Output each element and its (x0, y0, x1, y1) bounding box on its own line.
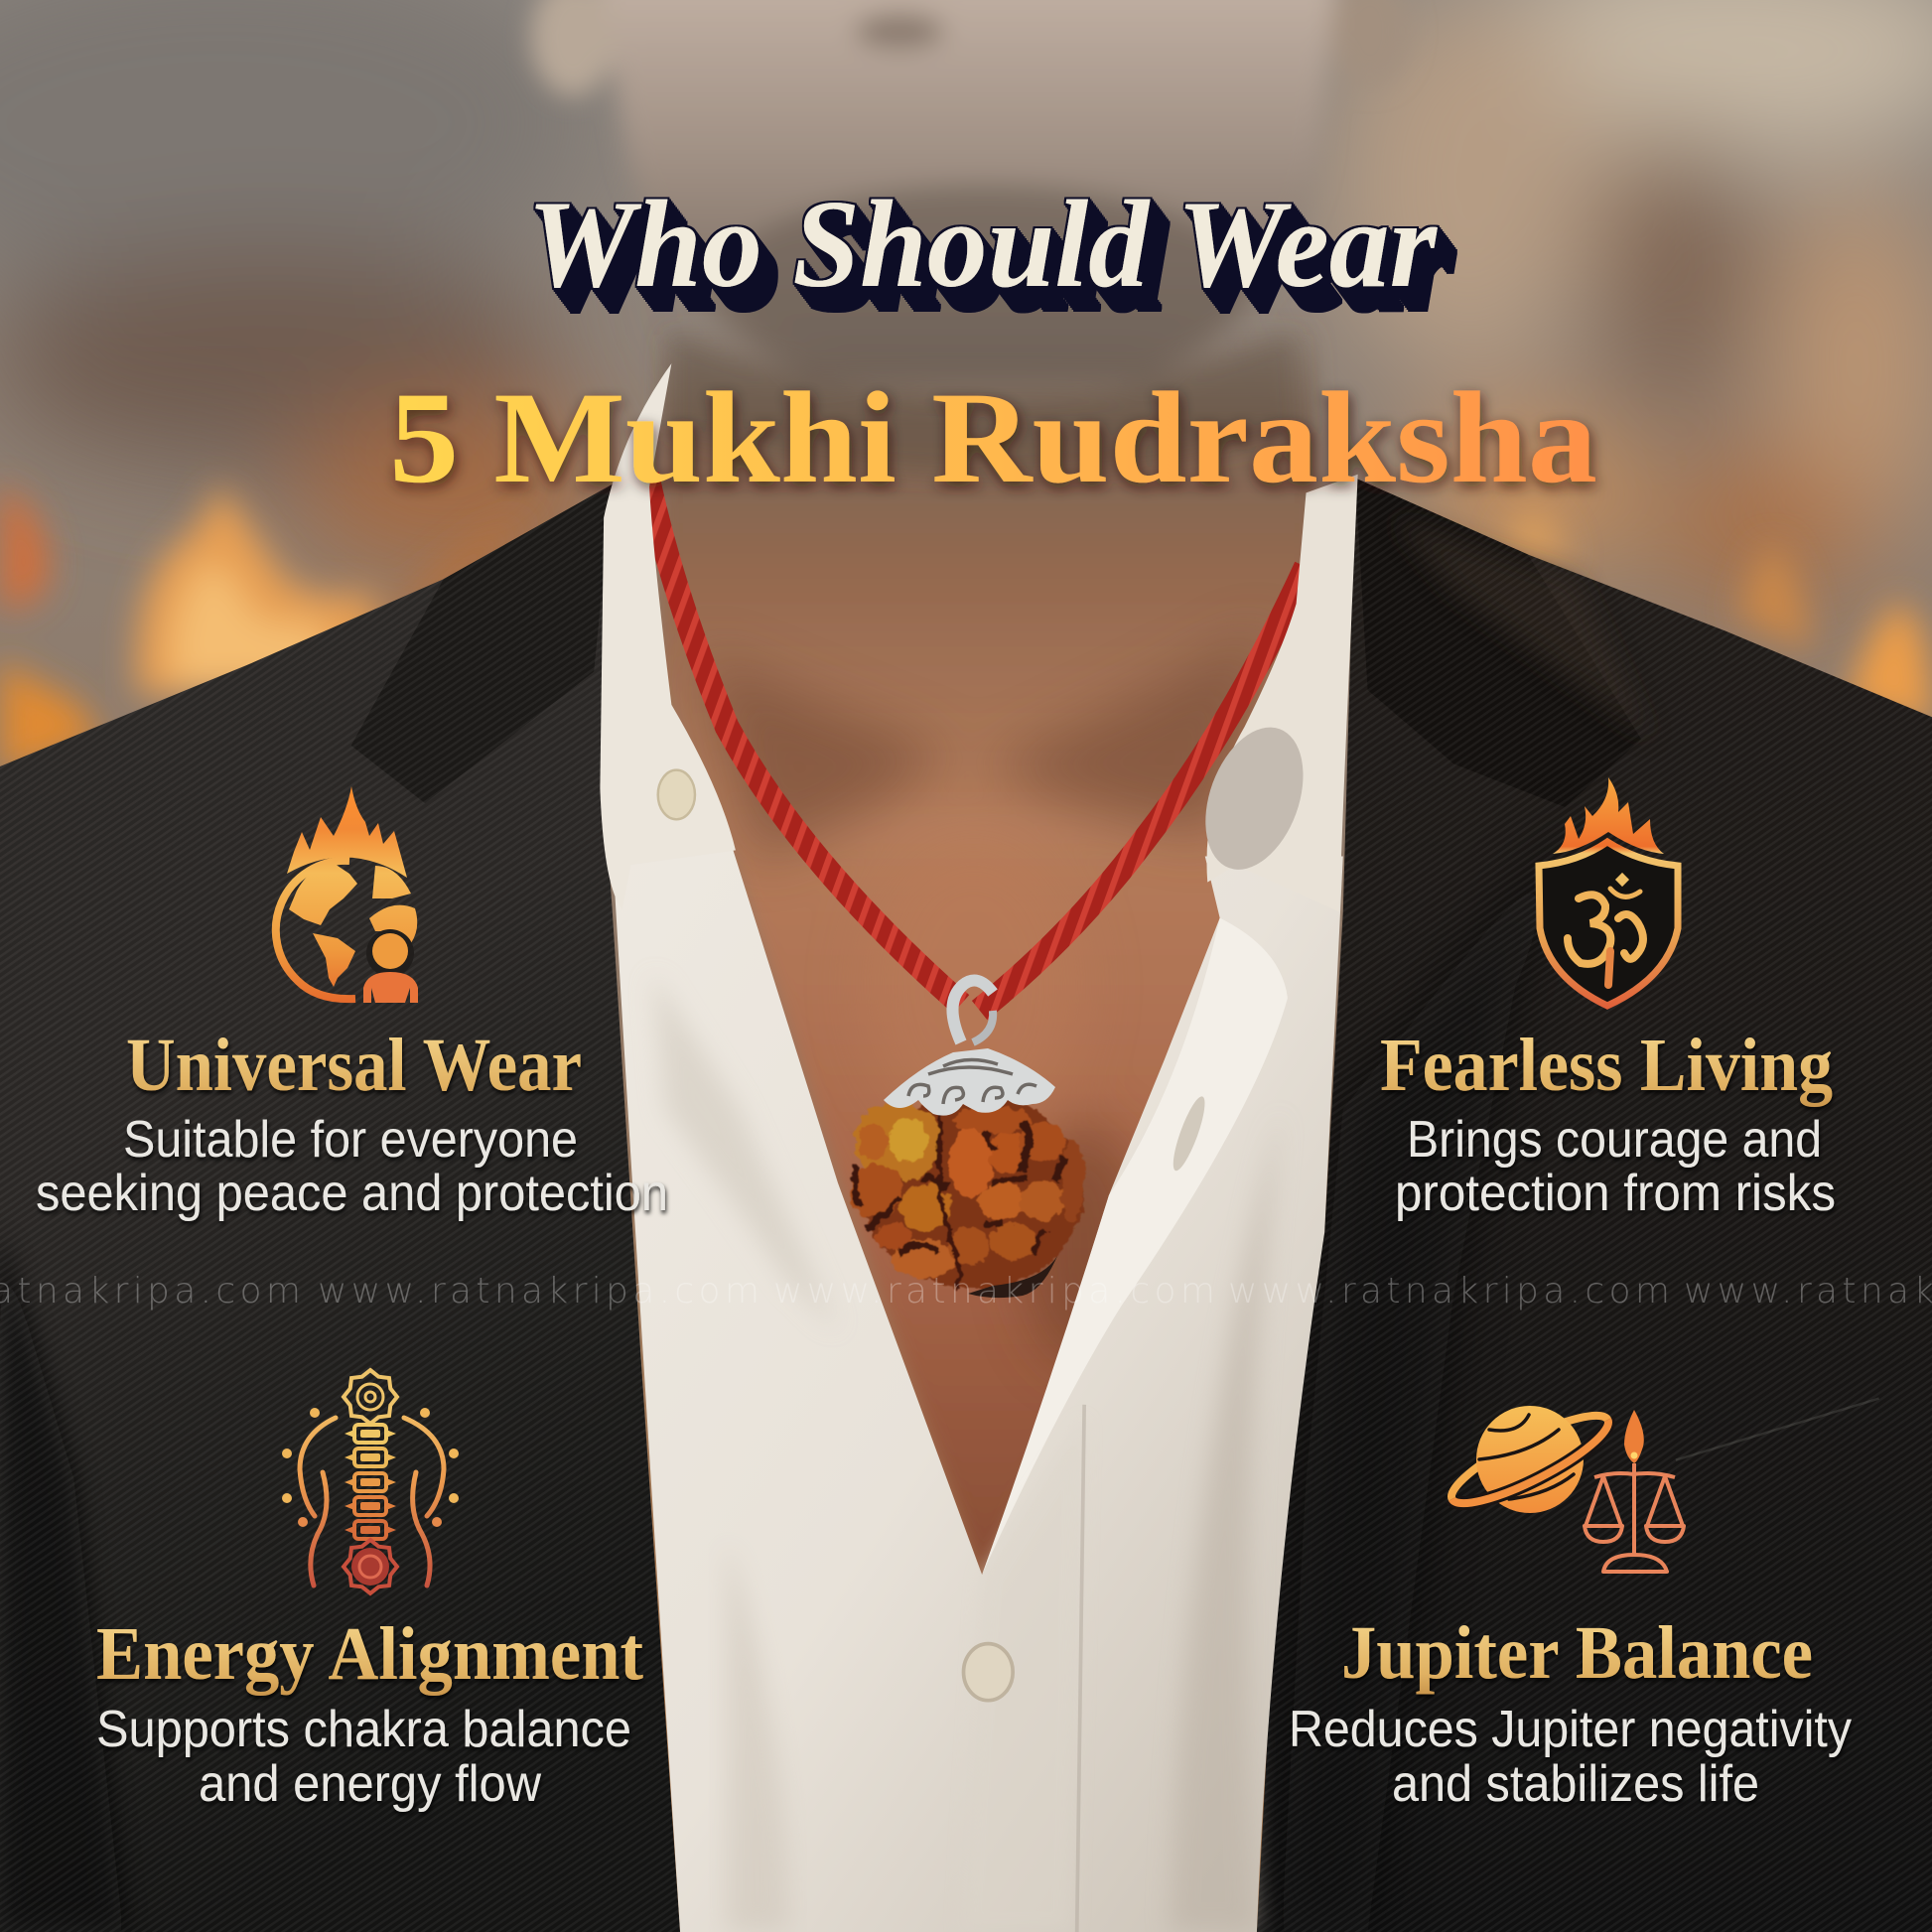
heading: Jupiter Balance (1341, 1611, 1813, 1695)
bare neck and chest (659, 321, 1318, 1589)
description (36, 1111, 668, 1222)
left jacket panel (0, 484, 680, 1932)
title line 2: 5 Mukhi Rudraksha (389, 364, 1597, 510)
description (1395, 1111, 1836, 1222)
panel: universal wear (36, 786, 668, 1222)
description: Supports chakra balance (96, 1701, 631, 1758)
heading: Fearless Living (1380, 1024, 1833, 1107)
icon: om shield with flames (1539, 777, 1678, 1006)
flames (0, 483, 1932, 776)
description: Brings courage and (1407, 1111, 1822, 1169)
right shirt collar (1187, 475, 1358, 911)
silver ring (952, 981, 993, 1042)
heading: Universal Wear (126, 1024, 582, 1107)
icon: spine with chakras (282, 1370, 459, 1593)
left shirt collar (600, 363, 736, 909)
watermark strip: www.ratnakripa.com (773, 1271, 1215, 1311)
icon: ringed planet and scales (1443, 1401, 1684, 1572)
description (96, 1701, 631, 1813)
description: and stabilizes life (1392, 1755, 1759, 1813)
red cord necklace (647, 475, 1307, 1011)
icon: flaming globe with person (276, 786, 418, 1003)
panel: energy alignment (96, 1370, 643, 1813)
description: and energy flow (199, 1755, 541, 1813)
white shirt (613, 801, 1343, 1932)
watermark strip (0, 1271, 1932, 1311)
silver filigree cap (884, 1048, 1055, 1116)
right jacket panel (1257, 479, 1932, 1932)
watermark strip: www.ratnakripa.com (1228, 1271, 1670, 1311)
title line 1: Who Should Wear (527, 176, 1438, 314)
description (1289, 1701, 1852, 1813)
blurred face at the top (531, 0, 1410, 475)
rudraksha bead (850, 1094, 1084, 1289)
description: seeking peace and protection (36, 1165, 668, 1222)
description: protection from risks (1395, 1165, 1836, 1222)
watermark strip: www.ratnakripa.com (318, 1271, 759, 1311)
pendant: rudraksha bead with silver cap (850, 981, 1084, 1298)
jacket shading (0, 479, 1932, 1932)
heading: Energy Alignment (96, 1612, 643, 1696)
panel: jupiter balance (1289, 1401, 1852, 1813)
panel: fearless living (1380, 777, 1836, 1222)
description: Suitable for everyone (123, 1111, 578, 1169)
description: Reduces Jupiter negativity (1289, 1701, 1852, 1758)
